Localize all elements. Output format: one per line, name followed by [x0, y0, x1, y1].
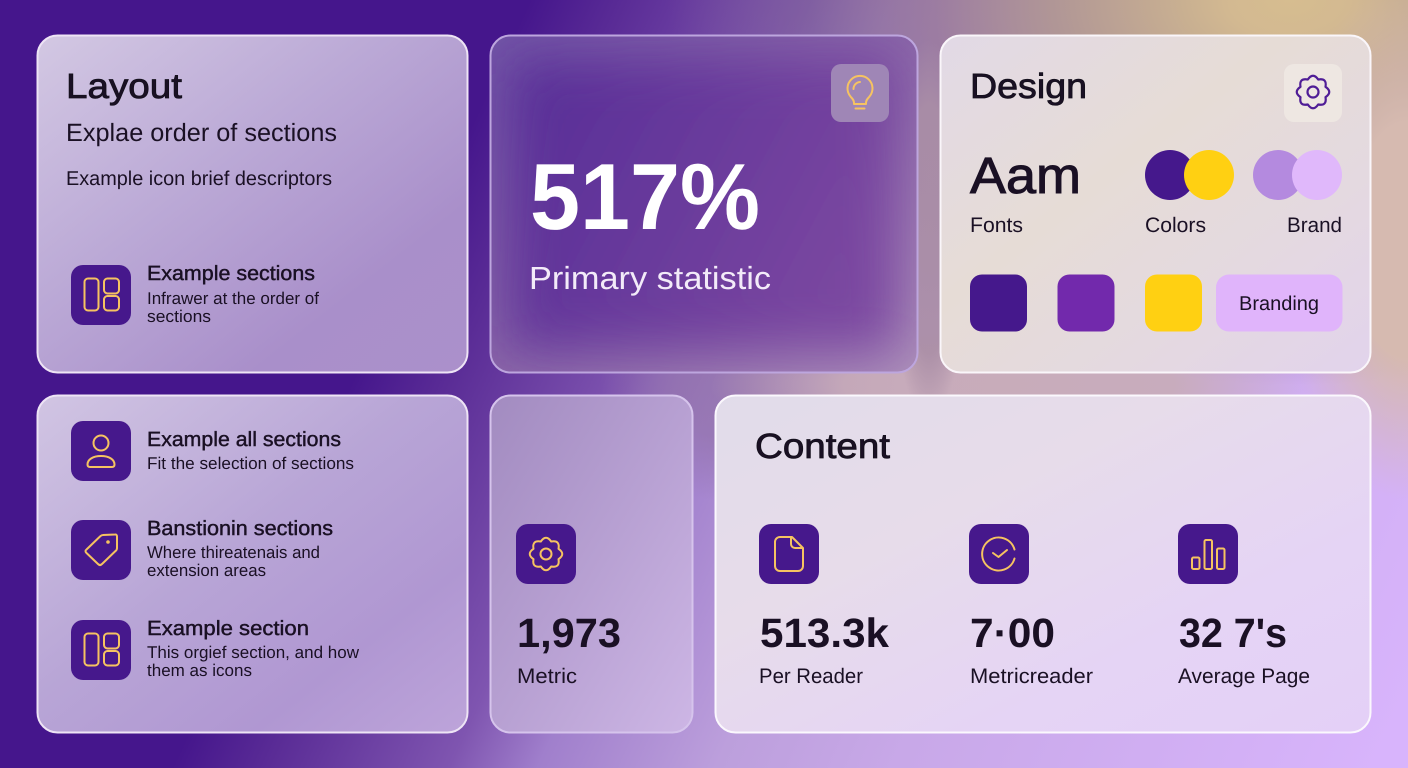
metric: Per Reader: Per Reader [759, 665, 863, 688]
heading: Layout: Layout [66, 67, 182, 106]
list item: Banstionin sections: Where thireatenais and [147, 543, 320, 562]
subheading: Explae order of sections [66, 119, 337, 147]
panel: design [940, 36, 1370, 372]
panel: section list [38, 396, 468, 732]
list item: Example all sections: Fit the selection of sections [147, 454, 354, 473]
list item: Example all sections: Example all sections [147, 428, 341, 451]
metric label: Metric [517, 665, 577, 688]
metric value: 1,973: 1,973 [517, 610, 621, 656]
metric: Average Page [1178, 610, 1310, 688]
brand swatches: Brand [1287, 214, 1342, 237]
list item: Example sections: sections [147, 307, 211, 326]
font sample: Aam [970, 147, 1081, 204]
icon: bar chart [1178, 524, 1238, 584]
list item: Banstionin sections [147, 517, 333, 580]
panel: primary statistic [490, 35, 918, 373]
heading: Design: Design [970, 67, 1087, 106]
brand swatches [1253, 150, 1342, 237]
label: Primary statistic: Primary statistic [529, 260, 771, 296]
metric: Metricreader [970, 610, 1093, 688]
icon: person [71, 421, 131, 481]
list item: Example sections: Example sections [147, 262, 315, 285]
color swatches [1145, 150, 1234, 237]
icon: gear [516, 524, 576, 584]
list item: Example section: This orgief section, and how [147, 643, 360, 662]
heading: Content: Content [755, 427, 890, 466]
metric: Average Page: 32 7's [1179, 610, 1287, 656]
list item: Example all sections [147, 428, 354, 473]
list item: Banstionin sections: Banstionin sections [147, 517, 333, 540]
icon: document [759, 524, 819, 584]
icon: layout grid [71, 620, 131, 680]
panel: layout [38, 36, 468, 372]
list item: Example section: them as icons [147, 661, 252, 680]
list item: Example sections [147, 262, 319, 326]
big number: 517%: 517% [530, 144, 760, 249]
panel: content [716, 396, 1370, 732]
metric: Per Reader: 513.3k [760, 610, 889, 656]
list item: Example section: Example section [147, 617, 309, 640]
color swatches: Colors [1145, 214, 1206, 237]
icon: clock check [969, 524, 1029, 584]
list item: Example sections: Infrawer at the order of [147, 289, 319, 308]
branding pill: Branding [1239, 293, 1319, 315]
branding pill [1216, 274, 1342, 332]
palette squares [970, 274, 1202, 332]
font sample: Fonts [970, 214, 1023, 237]
metric: Average Page: Average Page [1178, 665, 1310, 688]
icon: lightbulb [831, 64, 889, 122]
list item: Example section [147, 617, 360, 680]
metric: Metricreader: Metricreader [970, 665, 1093, 688]
list item: Banstionin sections: extension areas [147, 561, 266, 580]
descriptor text: Example icon brief descriptors [66, 168, 332, 190]
metric: Metricreader: 7·00 [970, 610, 1055, 656]
font sample [970, 147, 1081, 237]
icon: gear [1284, 64, 1342, 122]
metric: Per Reader [759, 610, 889, 688]
icon: layout grid [71, 265, 131, 325]
panel: metric [490, 396, 692, 732]
icon: tag [71, 520, 131, 580]
